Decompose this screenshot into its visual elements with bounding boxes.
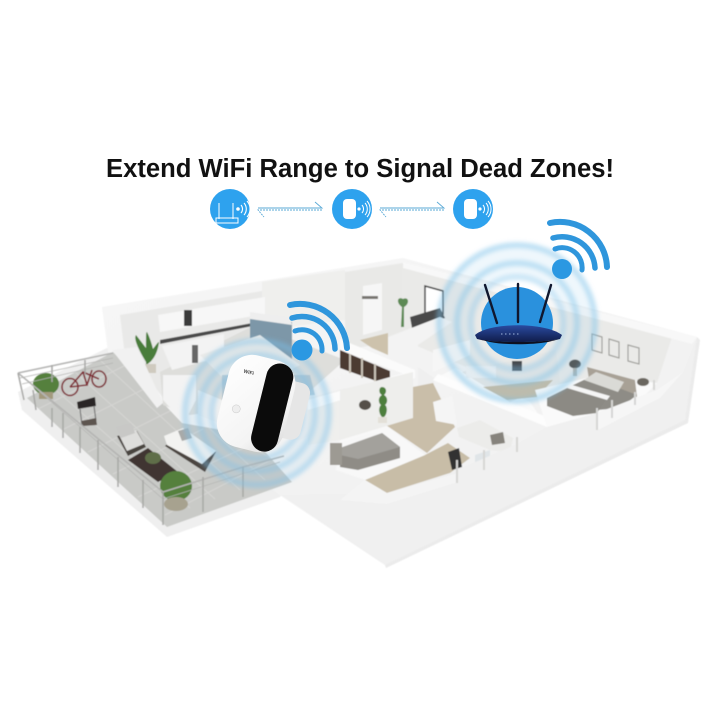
icon: second repeater badge — [453, 189, 493, 229]
lower bedroom bed — [330, 433, 400, 470]
infographic canvas — [16, 158, 700, 568]
icon: router badge — [210, 189, 250, 229]
device plug housing — [267, 378, 312, 442]
barbecue grill — [77, 397, 97, 426]
device wifi logo: WiFi — [243, 369, 255, 377]
blue circle behind router — [481, 287, 553, 359]
terrace plant front — [160, 471, 192, 511]
wood hallway floor — [383, 383, 455, 453]
arrow: router to repeater — [258, 202, 322, 217]
building shell — [102, 258, 697, 565]
repeater device — [212, 350, 316, 461]
lower room cabinet and sofa — [433, 396, 517, 480]
right bedroom — [535, 360, 657, 430]
lower bedroom floor and rug — [336, 372, 470, 493]
wall frames — [592, 334, 639, 364]
study room behind router — [433, 350, 560, 427]
signal rings: repeater — [185, 341, 329, 485]
terrace lip — [18, 345, 300, 537]
central rooms low walls — [388, 317, 470, 395]
router base — [477, 339, 560, 344]
wifi symbol: right — [550, 222, 607, 279]
front outer wall — [280, 337, 700, 568]
router status lights — [501, 333, 521, 335]
signal rings: router — [439, 245, 595, 401]
terrace railing — [18, 353, 284, 525]
center low walls — [198, 375, 345, 440]
router antennas — [485, 284, 551, 323]
kitchen floor and cabinets — [158, 297, 345, 415]
isometric floor plan — [18, 258, 700, 568]
router badge and router — [475, 284, 562, 359]
coffee table — [128, 448, 178, 482]
icon: first repeater badge — [332, 189, 372, 229]
terrace plant left — [33, 373, 59, 399]
window details — [457, 380, 654, 483]
title: Extend WiFi Range to Signal Dead Zones! — [106, 155, 614, 183]
arrow: repeater to repeater — [380, 202, 444, 217]
terrace sofa — [164, 428, 216, 472]
wardrobe room wall — [308, 339, 415, 445]
terrace bicycle — [62, 370, 106, 396]
lower bedroom plant and side table — [359, 387, 387, 423]
terrace armchair — [116, 423, 146, 456]
device WPS button mark — [231, 404, 241, 414]
device black front panel — [248, 361, 296, 454]
router body — [475, 325, 562, 342]
terrace tiled floor — [27, 352, 292, 527]
plant: kitchen doorway — [135, 332, 159, 373]
flow diagram: router to repeater to repeater — [210, 189, 493, 229]
upper hallway door and wood floor — [360, 283, 445, 355]
wifi symbol: left — [290, 304, 347, 360]
low wall by kitchen — [112, 347, 196, 423]
device body — [212, 350, 301, 457]
